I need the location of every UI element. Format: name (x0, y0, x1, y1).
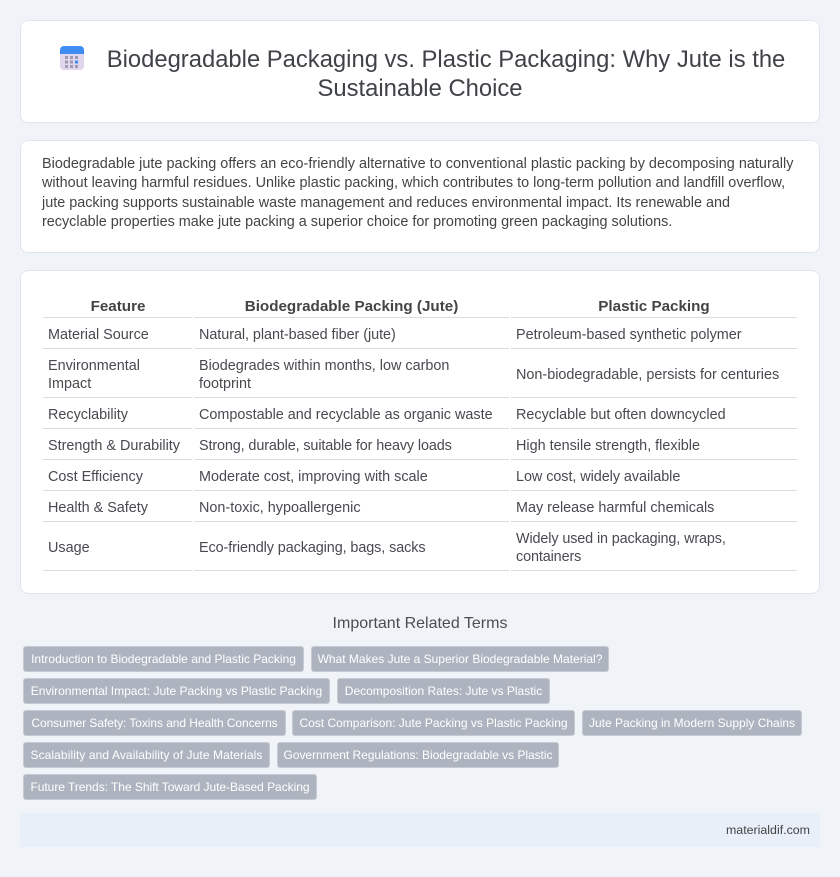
tag (311, 646, 609, 672)
heading: related terms: Important Related Terms (333, 615, 507, 632)
tag: Consumer Safety: Toxins and Health Concerns (31, 716, 278, 730)
footer (20, 813, 820, 847)
tag list (23, 646, 802, 800)
row: material source: Petroleum-based synthetic polymer (516, 327, 742, 343)
panel: header (20, 20, 820, 123)
title: Biodegradable Packaging vs. Plastic Packaging: Why Jute is the (107, 46, 785, 73)
row: cost efficiency: Cost Efficiency (48, 469, 143, 485)
tag: Jute Packing in Modern Supply Chains (589, 716, 795, 730)
row: environmental impact (48, 358, 779, 392)
tag: Government Regulations: Biodegradable vs Plastic (284, 748, 552, 762)
row: health and safety: Health & Safety (48, 500, 148, 516)
tag: Environmental Impact: Jute Packing vs Plastic Packing (31, 684, 322, 698)
row: cost efficiency: Moderate cost, improving with scale (199, 469, 428, 485)
tag (582, 710, 802, 736)
row: strength and durability: Strength & Durability (48, 438, 180, 454)
row: strength and durability: Strong, durable, suitable for heavy loads (199, 438, 452, 454)
row: environmental impact: Environmental (48, 358, 140, 374)
tag (23, 774, 317, 800)
table header: Biodegradable Packing (Jute) (245, 298, 458, 315)
intro paragraph: without leaving harmful residues. Unlike plastic packing, which contributes to long-term pollution and landfill overflow, (42, 175, 785, 191)
row: environmental impact: Impact (48, 376, 91, 392)
row: recyclability: Recyclability (48, 407, 128, 423)
row: health and safety: May release harmful chemicals (516, 500, 714, 516)
tag: What Makes Jute a Superior Biodegradable Material? (318, 652, 602, 666)
footer source: materialdif.com (726, 823, 810, 837)
tag (23, 710, 286, 736)
row: strength and durability (48, 438, 700, 454)
row: usage: Widely used in packaging, wraps, (516, 531, 726, 547)
tag (277, 742, 559, 768)
row: material source: Material Source (48, 327, 149, 343)
intro paragraph: Biodegradable jute packing offers an eco-friendly alternative to conventional plastic packing by decomposing naturally (42, 156, 793, 172)
row: usage (48, 531, 726, 565)
tag: Decomposition Rates: Jute vs Plastic (345, 684, 542, 698)
intro paragraph (42, 156, 794, 230)
row: health and safety (48, 500, 714, 516)
tag (23, 742, 270, 768)
tag (292, 710, 575, 736)
table header (91, 298, 710, 315)
tag (337, 678, 550, 704)
row: recyclability: Compostable and recyclable as organic waste (199, 407, 493, 423)
intro paragraph: recyclable properties make jute packing a superior choice for promoting green packaging solutions. (42, 214, 672, 230)
row: material source (48, 327, 742, 343)
row: usage: containers (516, 549, 581, 565)
tag: Cost Comparison: Jute Packing vs Plastic Packing (299, 716, 568, 730)
row: health and safety: Non-toxic, hypoallergenic (199, 500, 361, 516)
icon: calendar (60, 46, 84, 70)
panel: comparison table (20, 270, 820, 594)
tag: Introduction to Biodegradable and Plastic Packing (31, 652, 296, 666)
row: cost efficiency: Low cost, widely available (516, 469, 680, 485)
row: environmental impact: footprint (199, 376, 251, 392)
row: usage: Usage (48, 540, 90, 556)
row: recyclability (48, 407, 726, 423)
tag (23, 678, 330, 704)
row: environmental impact: Non-biodegradable, persists for centuries (516, 367, 779, 383)
tag: Scalability and Availability of Jute Materials (30, 748, 263, 762)
row: strength and durability: High tensile strength, flexible (516, 438, 700, 454)
tag (23, 646, 304, 672)
title (107, 46, 785, 102)
row: cost efficiency (48, 469, 680, 485)
tag: Future Trends: The Shift Toward Jute-Based Packing (30, 780, 310, 794)
row: material source: Natural, plant-based fiber (jute) (199, 327, 396, 343)
table header: Feature (91, 298, 145, 315)
row: environmental impact: Biodegrades within months, low carbon (199, 358, 449, 374)
row: recyclability: Recyclable but often downcycled (516, 407, 726, 423)
title: Sustainable Choice (317, 75, 523, 102)
panel: introduction (20, 140, 820, 253)
intro paragraph: jute packing supports sustainable waste management and reduces environmental impact. Its renewable and (42, 195, 730, 211)
table header: Plastic Packing (598, 298, 710, 315)
row: usage: Eco-friendly packaging, bags, sacks (199, 540, 425, 556)
